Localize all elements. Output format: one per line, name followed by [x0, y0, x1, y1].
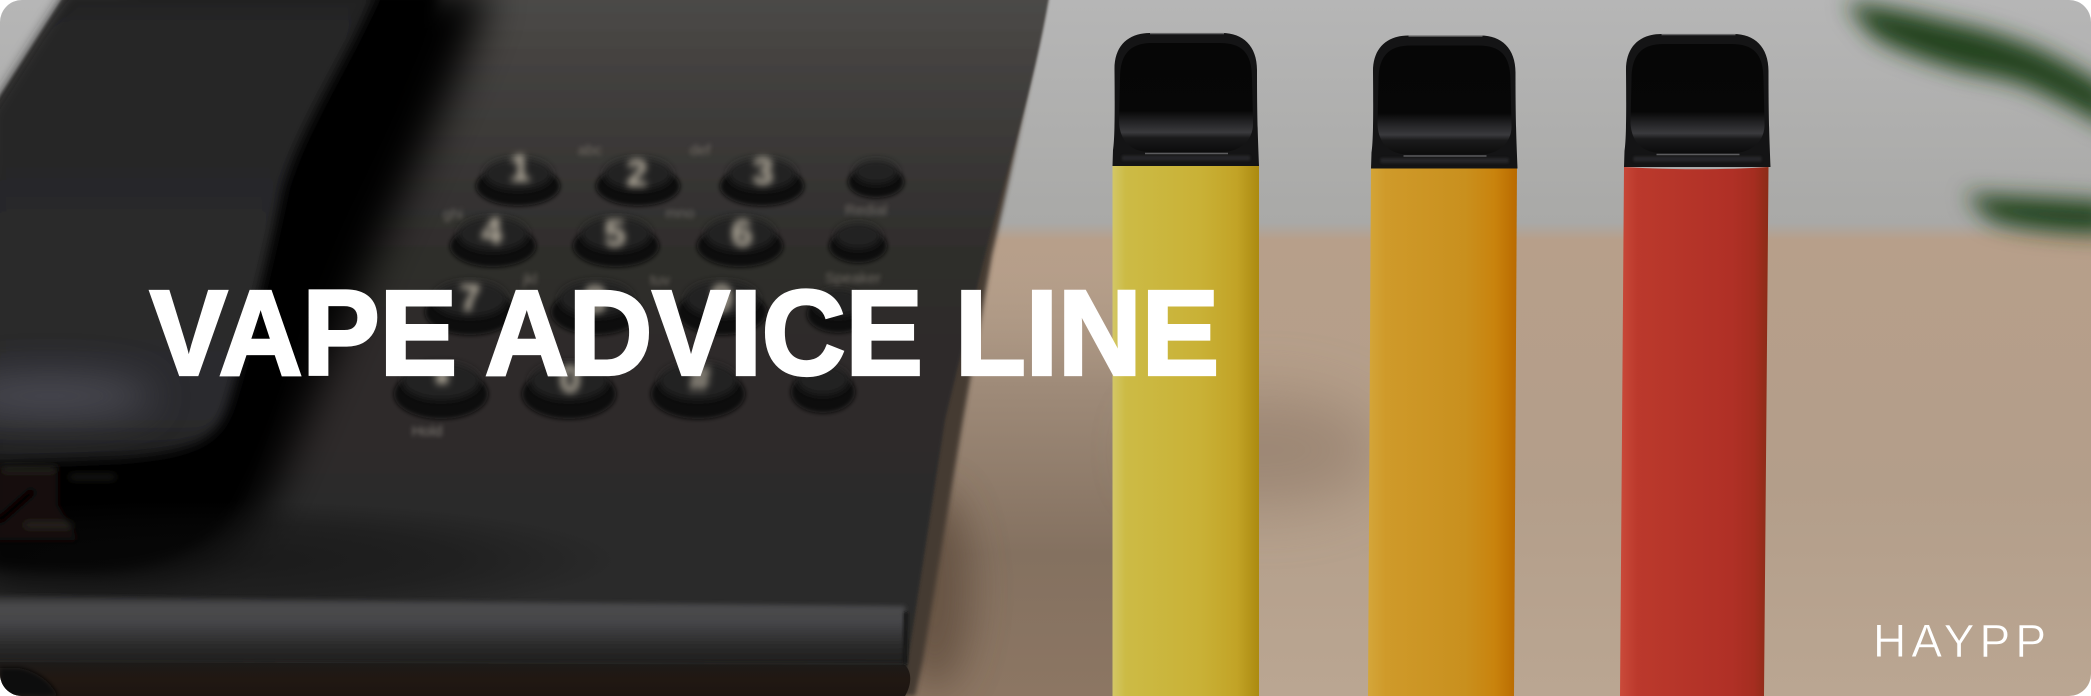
keypad labels: jkl	[522, 271, 537, 288]
keypad labels: Hold	[412, 423, 442, 440]
socket and cord	[0, 464, 114, 541]
keypad labels: mno	[665, 205, 695, 222]
telephone cord coil	[0, 668, 58, 696]
keypad digits: 3	[752, 151, 774, 193]
handset shadow	[0, 0, 504, 597]
keypad digits: 7	[459, 278, 481, 320]
keypad	[394, 142, 904, 440]
plant leaves	[1845, 2, 2091, 234]
keypad digits: 9	[711, 278, 733, 320]
keypad digits: 2	[626, 153, 648, 195]
phone body	[0, 0, 1050, 696]
keypad labels: ghi	[443, 206, 463, 223]
keypad labels: Speaker	[825, 270, 881, 287]
keypad labels: Redial	[845, 202, 887, 219]
title: VAPE ADVICE LINE	[150, 264, 1219, 400]
keypad digits: 6	[731, 213, 753, 255]
vape device: orange	[1368, 36, 1518, 696]
handset	[0, 0, 378, 464]
keypad digits: *	[435, 364, 450, 406]
keypad labels: tuv	[650, 272, 671, 289]
keypad digits: #	[689, 358, 711, 400]
vape device: yellow	[1112, 33, 1259, 696]
keypad digits: 0	[559, 359, 581, 401]
keypad labels	[412, 142, 887, 440]
keypad digits: 1	[509, 148, 531, 190]
vape device: red	[1620, 34, 1770, 696]
keypad digits	[435, 148, 774, 406]
keypad labels: def	[690, 142, 711, 159]
keypad digits: 5	[604, 213, 626, 255]
phone side panel	[905, 0, 1050, 696]
keypad labels: abc	[578, 142, 603, 159]
logo: HAYPP: HAYPP	[1873, 615, 2046, 667]
phone base front edge	[0, 596, 910, 696]
keypad digits: 8	[584, 279, 606, 321]
table shadow near phone	[880, 250, 1380, 696]
telephone	[0, 0, 1050, 696]
keypad digits: 4	[481, 211, 503, 253]
